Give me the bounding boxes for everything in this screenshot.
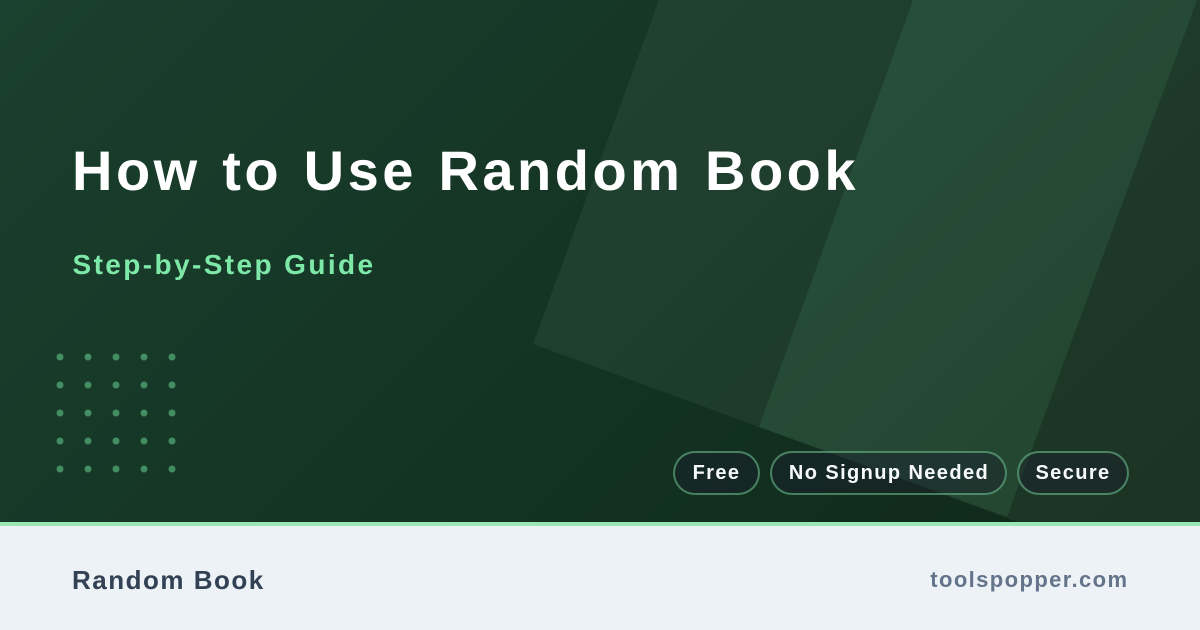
footer site url: toolspopper.com — [930, 567, 1128, 592]
pill: secure: Secure — [1035, 462, 1111, 484]
dot grid — [56, 354, 176, 472]
pill: secure — [1017, 451, 1129, 495]
pill: free — [673, 451, 760, 495]
footer bar — [0, 522, 1200, 630]
pill: no signup needed: No Signup Needed — [789, 462, 989, 484]
feature pills — [673, 451, 1129, 495]
pill: no signup needed — [770, 451, 1007, 495]
subtitle: Step-by-Step Guide — [72, 249, 376, 280]
title: How to Use Random Book — [72, 139, 859, 202]
pill: free: Free — [693, 462, 740, 484]
footer brand name: Random Book — [72, 565, 265, 595]
